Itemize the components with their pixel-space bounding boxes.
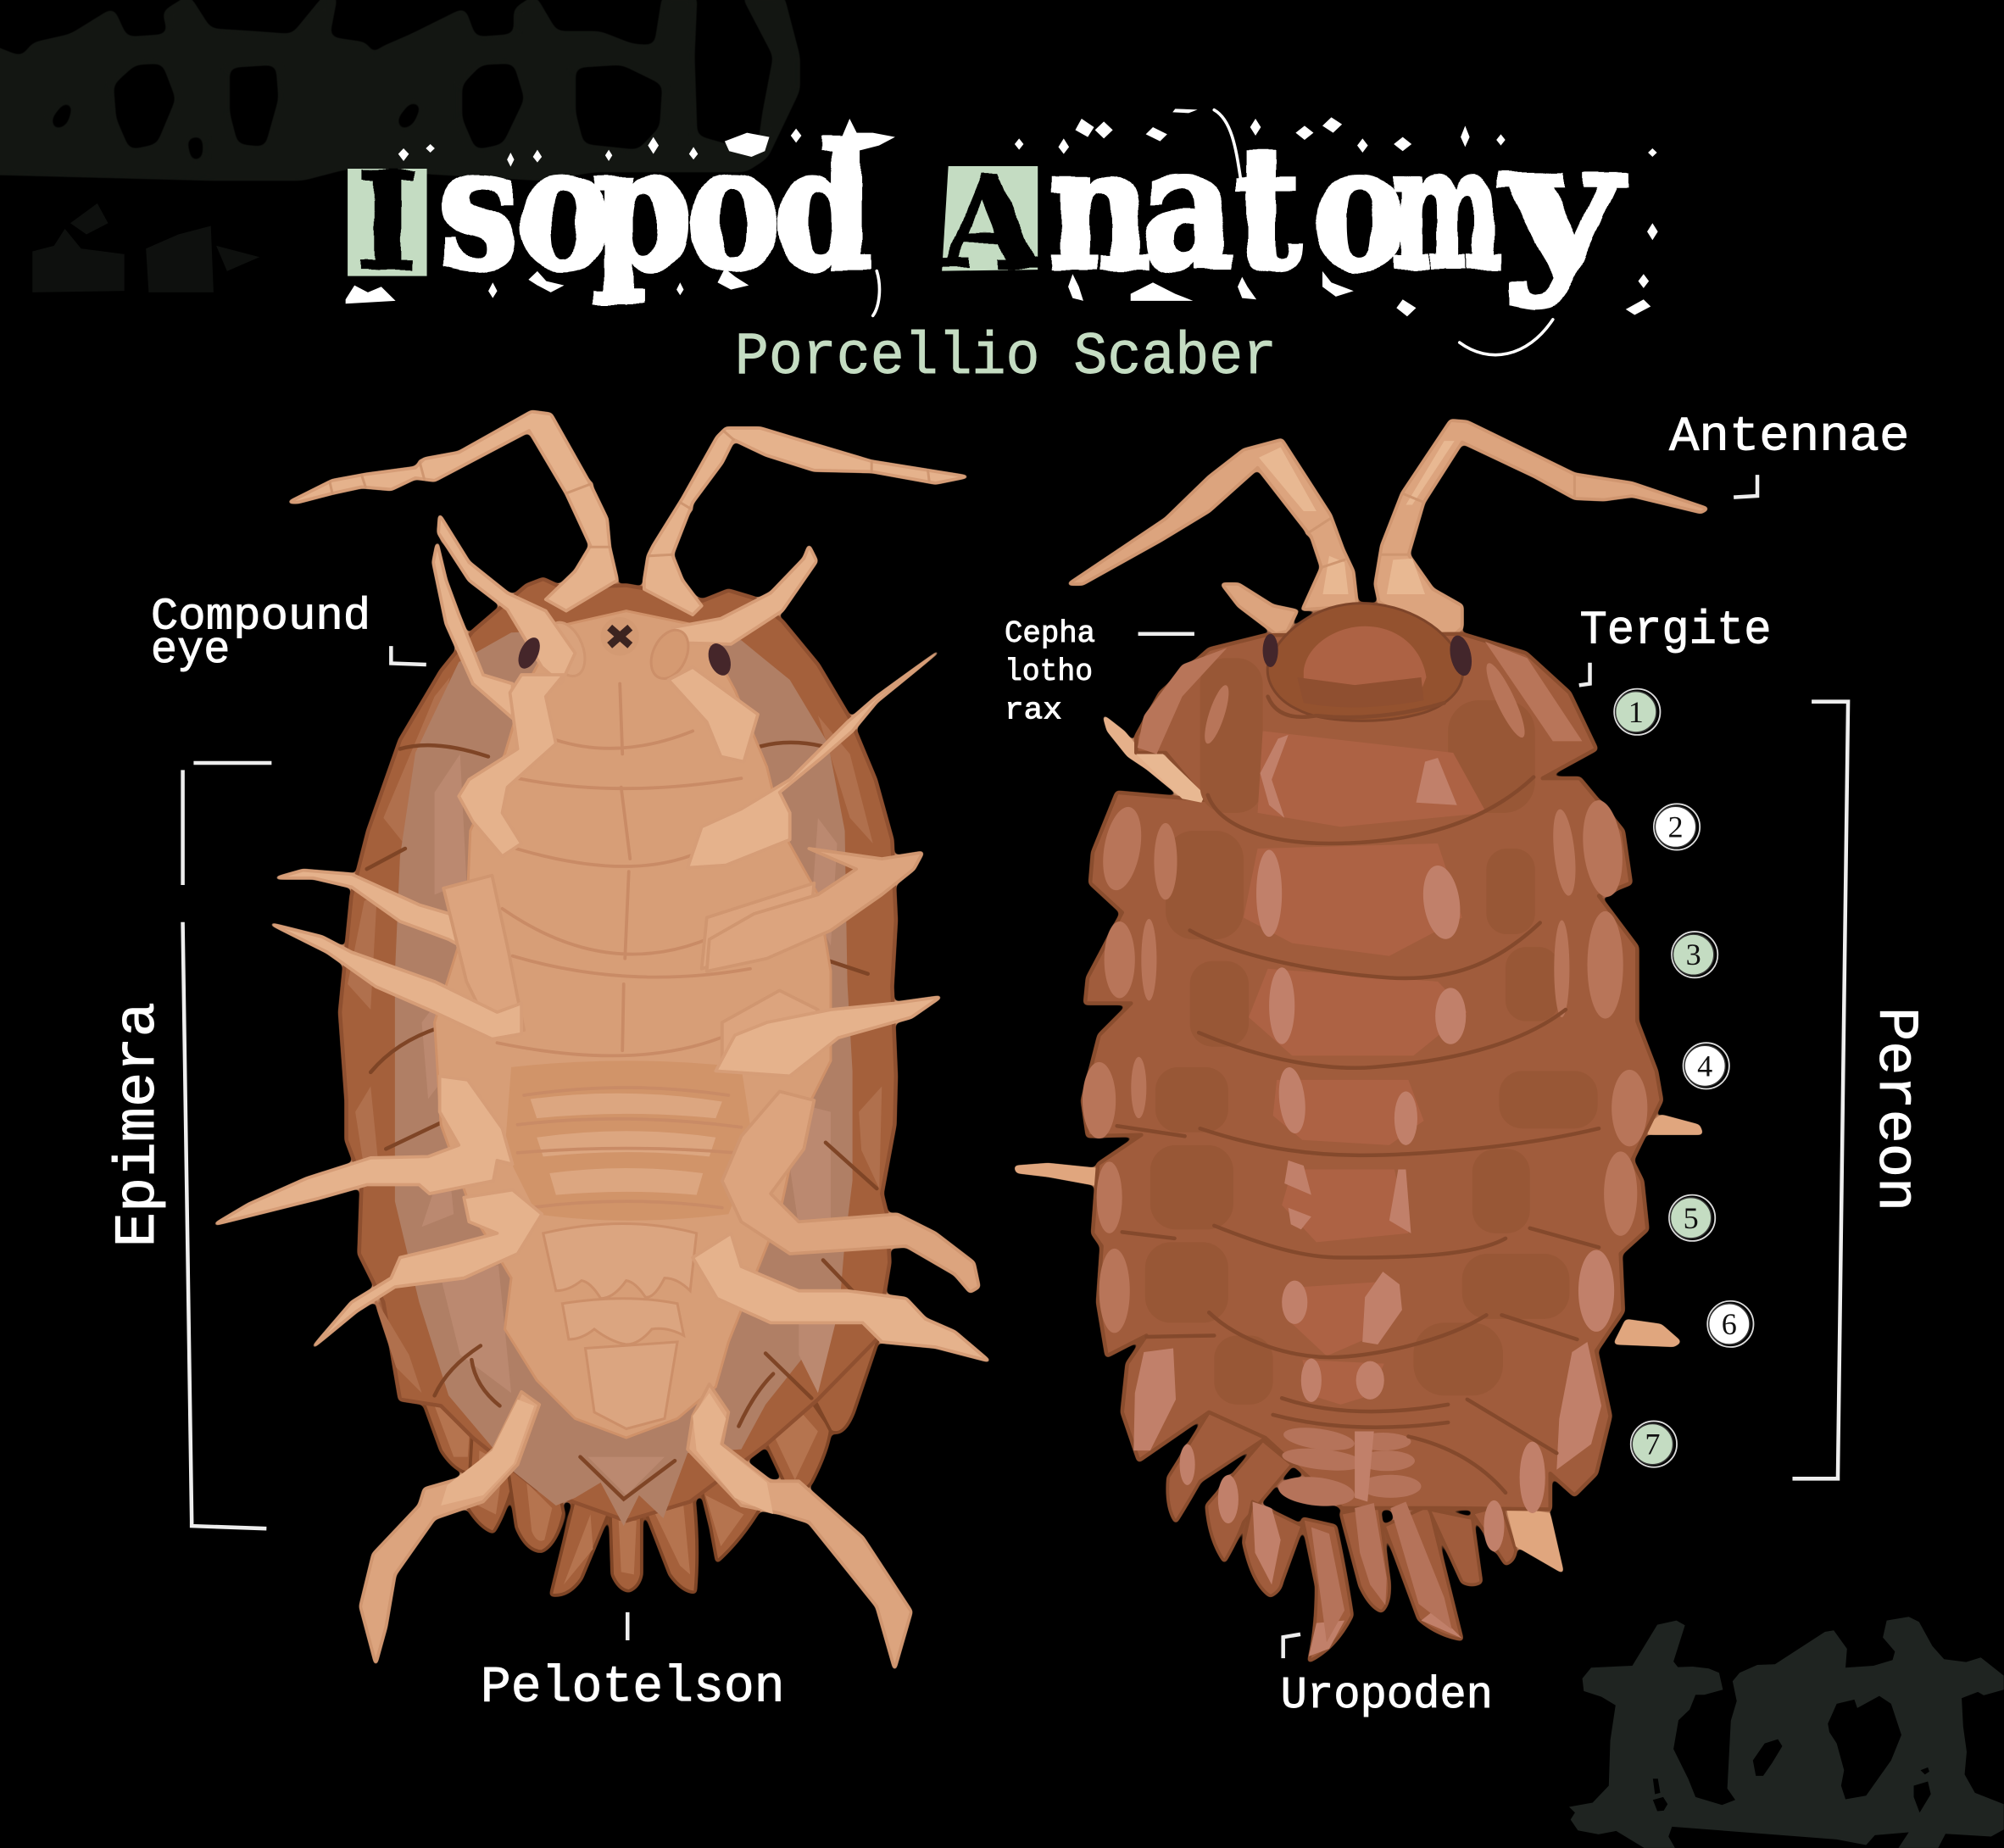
marker 1: [1614, 689, 1660, 735]
marker 2: 2: [1667, 810, 1684, 843]
left isopod: ventral view: [214, 411, 989, 1669]
antennule right: [672, 546, 816, 644]
head lobes: [540, 617, 696, 685]
label: compound eye: eye: [151, 625, 230, 676]
front leg overlap: [1136, 754, 1205, 803]
marker 4: 4: [1697, 1049, 1712, 1083]
side highlights: [1083, 642, 1647, 1333]
antennule: [1222, 584, 1297, 634]
right isopod: dorsal view: [1014, 420, 1707, 1662]
marker 6: [1707, 1301, 1753, 1347]
body plates: [435, 611, 831, 1438]
title: [346, 102, 1658, 355]
carapace light bands: [348, 677, 882, 1393]
pointer: antennae: [1735, 476, 1757, 497]
marker 7: [1631, 1421, 1677, 1467]
leg 6 right: [693, 1233, 989, 1361]
centre plates: [1258, 731, 1486, 827]
bracket: pereon: [1795, 702, 1848, 1478]
tail plates: [1277, 1424, 1452, 1642]
pointer: tergite: [1581, 665, 1590, 685]
antenna left: [289, 411, 617, 611]
number markers: [1614, 689, 1753, 1467]
title text: nato: [1048, 109, 1406, 308]
title text: I: [355, 142, 419, 302]
label: antennae: Antennae: [1669, 410, 1909, 465]
antennule left inner: [438, 515, 575, 684]
title text: m: [1391, 110, 1502, 308]
background watermark: bottom right: [1569, 1617, 2004, 1848]
pointer: compound eye: [391, 648, 425, 665]
title text: sopod: [439, 109, 873, 308]
title speckles: [346, 109, 1658, 316]
body shading: [505, 1060, 754, 1221]
marker 2: [1654, 804, 1700, 850]
letter box: I: [348, 169, 427, 276]
label: compound eye: Compound: [151, 592, 370, 643]
antenna right: [1375, 420, 1707, 640]
label: pereon: Pereon: [1863, 1007, 1927, 1211]
label: pelotelson: Pelotelson: [481, 1660, 785, 1717]
tail lobes: [415, 1316, 882, 1595]
mouth mark: [601, 617, 639, 655]
leg 5 right: [722, 1091, 979, 1292]
leg 6 left: [313, 1190, 542, 1347]
title text: [355, 102, 1628, 309]
marker 6: 6: [1722, 1307, 1737, 1341]
leg 2 right: [687, 652, 938, 868]
label: cephalothorax: rax: [1005, 693, 1062, 727]
pointer: uropoden: [1283, 1634, 1299, 1656]
bracket: epimera: [183, 763, 270, 1528]
side legs: [1014, 1115, 1704, 1347]
marker 7: 7: [1645, 1428, 1660, 1461]
tail lobes: [1167, 1412, 1564, 1662]
leg 1 left: [459, 675, 564, 856]
shell: [1083, 634, 1662, 1509]
segment lines: [1117, 697, 1599, 1493]
centre highlights: [1256, 735, 1466, 1402]
hip right: [702, 883, 814, 969]
inner lighter patches: [422, 754, 838, 1495]
pointer: cephalothorax: [1140, 632, 1193, 635]
carapace marks: [367, 743, 877, 1499]
title text: y: [1500, 102, 1628, 309]
eyes: [514, 634, 544, 672]
front leg: [1102, 713, 1205, 800]
rear leg left: [360, 1392, 539, 1664]
background watermark: top left: [0, 0, 800, 292]
dark lateral bands: [1145, 658, 1598, 1405]
leg 1 right: [669, 667, 758, 762]
antennule left outer: [433, 543, 513, 718]
leg 3 left: [276, 871, 508, 961]
letter box: A: [942, 166, 1038, 271]
leg 5 left: [214, 1076, 513, 1224]
antenna left: [1068, 440, 1357, 610]
subtitle: Porcellio Scaber: [735, 324, 1277, 392]
marker 5: 5: [1684, 1201, 1699, 1235]
marker 3: 3: [1686, 938, 1701, 971]
carapace: [340, 579, 896, 1521]
leg 4 left: [271, 924, 521, 1039]
marker 3: [1672, 932, 1717, 977]
title text: A: [939, 147, 1042, 298]
pointer: pelotelson: [626, 1614, 629, 1639]
rear leg right: [687, 1384, 911, 1669]
head: [1267, 604, 1463, 721]
hip right lower: [722, 990, 818, 1071]
leg 4 right: [715, 997, 941, 1076]
hip left: [443, 876, 524, 1034]
marker 5: [1669, 1195, 1715, 1241]
label: cephalothorax: Cepha: [1005, 616, 1095, 651]
label: tergite: Tergite: [1579, 604, 1772, 657]
inner underside: [395, 626, 853, 1526]
eyes: [1263, 634, 1278, 667]
marker 1: 1: [1628, 695, 1644, 729]
label: uropoden: Uropoden: [1281, 1670, 1493, 1721]
body seams: [488, 684, 750, 1208]
label: epimera: Epimera: [107, 1002, 171, 1247]
antenna right: [644, 428, 967, 615]
leg 3 right: [707, 849, 923, 971]
marker 4: [1684, 1043, 1729, 1088]
label: cephalothorax: lotho: [1005, 654, 1093, 689]
